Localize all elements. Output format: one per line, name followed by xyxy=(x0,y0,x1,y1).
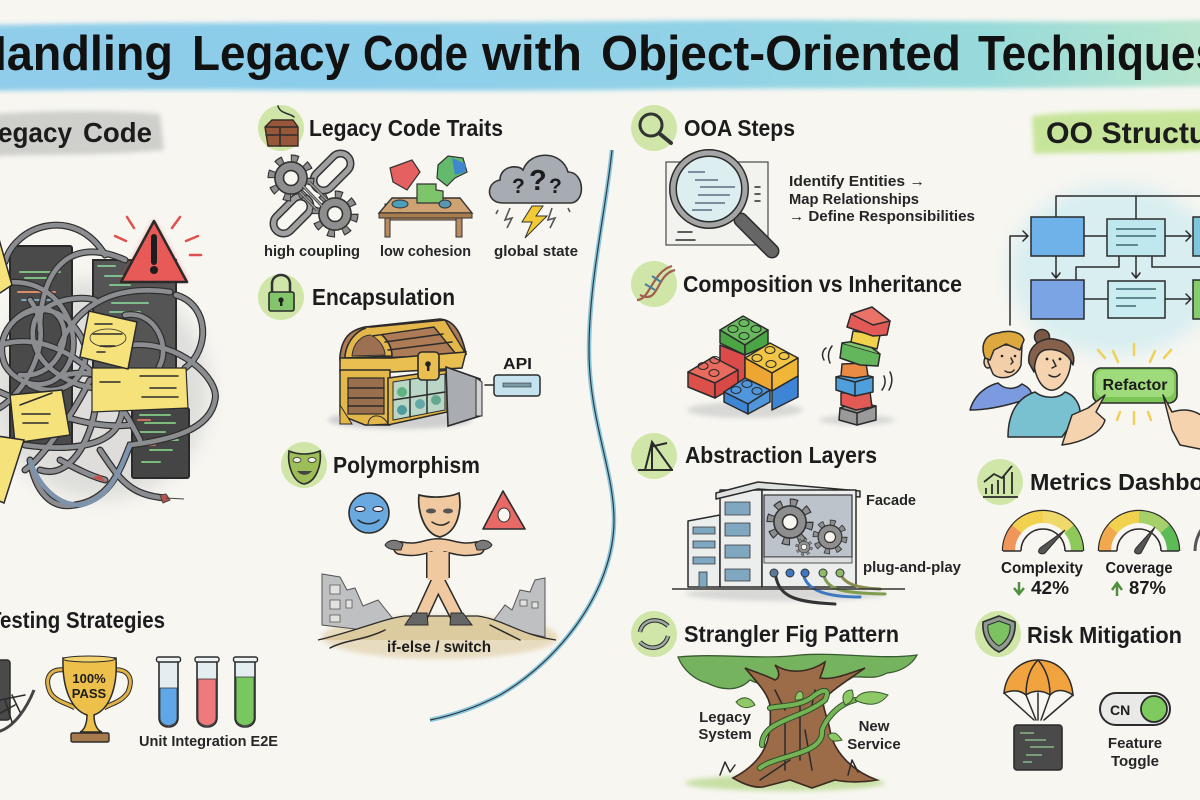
label: API: API xyxy=(503,356,532,373)
sticky notes xyxy=(0,232,188,503)
label: legacy system: Legacy xyxy=(699,709,752,726)
icon: padlock xyxy=(258,274,304,320)
icon: parachute with code box xyxy=(1004,660,1073,770)
icon: old crate xyxy=(258,105,304,151)
labels: abstraction layers: plug-and-play xyxy=(863,559,962,576)
illustration: wobbly inheritance tower xyxy=(819,307,895,425)
illustration: document under magnifier xyxy=(666,153,772,251)
panel: legacy code xyxy=(0,111,215,506)
panel: composition vs inheritance xyxy=(631,261,962,425)
title: with xyxy=(481,27,582,81)
text: OOA steps: Map Relationships xyxy=(789,191,919,208)
heading: abstraction layers: Abstraction Layers xyxy=(685,442,877,468)
labels: traits: global state xyxy=(494,243,578,260)
panel: OOA steps xyxy=(631,105,975,251)
label: legacy system: System xyxy=(698,726,752,743)
icon: storm cloud: ? xyxy=(549,175,562,198)
illustration: stable lego blocks xyxy=(687,316,803,418)
heading: polymorphism: Polymorphism xyxy=(333,452,480,478)
labels: traits xyxy=(264,243,578,260)
label: complexity xyxy=(1001,560,1083,598)
illustration: facade building xyxy=(672,482,905,604)
text: OOA steps: Identify Entities → xyxy=(789,173,925,190)
heading: legacy code traits: Legacy Code Traits xyxy=(309,115,503,141)
label: complexity: Complexity xyxy=(1001,560,1083,577)
label: test levels: Unit Integration E2E xyxy=(139,733,278,750)
panel: strangler fig pattern xyxy=(631,611,917,791)
panel: abstraction layers xyxy=(631,433,962,604)
text: OOA steps: → Define Responsibilities xyxy=(789,208,975,225)
icon: trophy xyxy=(48,656,130,742)
label: if-else / switch: if-else / switch xyxy=(387,639,491,656)
title xyxy=(0,27,1200,81)
heading: legacy code: Code xyxy=(83,117,152,148)
icon: puzzle table xyxy=(379,156,472,237)
title banner xyxy=(0,20,1200,91)
gauge: coverage xyxy=(1099,511,1179,554)
label: legacy system xyxy=(698,709,752,743)
illustration: tangled servers xyxy=(0,225,215,506)
text: OOA steps xyxy=(789,173,975,225)
heading: encapsulation: Encapsulation xyxy=(312,284,455,310)
labels: abstraction layers xyxy=(863,492,962,576)
labels: abstraction layers: Facade xyxy=(866,492,916,509)
button: refactor xyxy=(1093,344,1177,424)
label: feature toggle: Toggle xyxy=(1111,753,1159,770)
icon: storm cloud: ? xyxy=(512,175,525,198)
label: coverage: 87% xyxy=(1129,578,1166,598)
icon: pressing hands xyxy=(1062,395,1200,450)
heading: composition vs inheritance: Composition vs Inheritance xyxy=(683,271,962,297)
heading: strangler fig pattern: Strangler Fig Pattern xyxy=(684,621,899,647)
icon: abstraction tent xyxy=(631,433,677,479)
label: API xyxy=(485,356,540,396)
illustration: treasure chest xyxy=(328,319,482,429)
icon: test tubes xyxy=(156,657,258,727)
illustration: polymorphic figure on ruins xyxy=(318,491,558,659)
icon: DNA helix xyxy=(631,261,677,307)
icon: server in safety net xyxy=(0,660,34,732)
icon: growth chart xyxy=(977,459,1023,505)
button: refactor: Refactor xyxy=(1103,377,1167,394)
panel: risk mitigation xyxy=(975,611,1182,770)
panel: polymorphism xyxy=(281,442,558,659)
heading: OOA steps: OOA Steps xyxy=(684,115,795,141)
divider curve xyxy=(430,150,614,720)
icon: shield xyxy=(975,611,1021,657)
title: Legacy xyxy=(192,27,350,81)
diagram: class boxes and arrows xyxy=(1010,185,1200,355)
illustration: developers xyxy=(970,330,1080,437)
panel: OO structure xyxy=(970,110,1200,450)
heading: risk mitigation: Risk Mitigation xyxy=(1027,622,1182,648)
label: coverage: Coverage xyxy=(1106,560,1173,577)
icon: magnifier xyxy=(631,105,677,151)
gauge: third partial xyxy=(1195,520,1200,551)
label: new service xyxy=(847,718,901,753)
icon: storm cloud xyxy=(489,155,581,238)
icon: storm cloud: ? xyxy=(529,165,547,197)
labels: traits: high coupling xyxy=(264,243,360,260)
panel: metrics dashboard xyxy=(977,459,1200,598)
icon: trophy: PASS xyxy=(72,686,107,701)
icon: feature toggle xyxy=(1100,693,1170,725)
icon: theatre mask xyxy=(281,442,327,488)
illustration: strangler fig tree xyxy=(678,654,917,791)
icon: cycle arrows xyxy=(631,611,677,657)
panel: legacy code traits xyxy=(258,105,581,260)
panel: testing strategies xyxy=(0,607,278,750)
label: feature toggle: Feature xyxy=(1108,735,1162,752)
icon: feature toggle: CN xyxy=(1110,702,1130,718)
heading: legacy code xyxy=(0,117,152,148)
title: Code xyxy=(363,27,468,81)
label: complexity: 42% xyxy=(1031,578,1069,598)
labels: traits: low cohesion xyxy=(380,243,471,260)
label: feature toggle xyxy=(1108,735,1162,770)
title: Object-Oriented xyxy=(601,27,961,81)
icon: trophy: 100% xyxy=(72,671,106,686)
label: new service: New xyxy=(859,718,890,735)
panel: encapsulation xyxy=(258,274,540,429)
label: new service: Service xyxy=(847,736,901,753)
icon: warning triangle xyxy=(115,217,201,282)
icon: gears and chain xyxy=(269,149,355,238)
gauge: complexity xyxy=(1003,511,1083,554)
label: coverage xyxy=(1106,560,1173,598)
